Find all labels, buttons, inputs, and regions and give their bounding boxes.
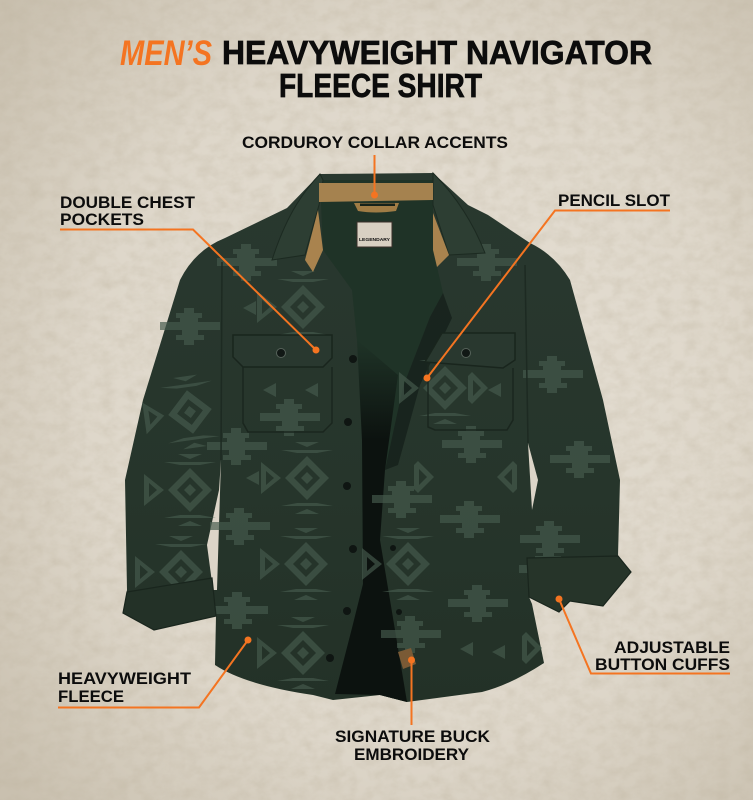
- front buttons: [326, 355, 402, 662]
- buck embroidery patch: [398, 648, 416, 669]
- callout: double chest pockets: DOUBLE CHEST: [60, 193, 196, 212]
- lapel shadow: [385, 293, 452, 470]
- title line one: HEAVYWEIGHT NAVIGATOR: [222, 34, 652, 71]
- callout: adjustable button cuffs: ADJUSTABLE: [614, 638, 730, 657]
- title: [120, 34, 652, 104]
- collar right: [433, 173, 485, 255]
- sleeve gap right: [528, 443, 538, 510]
- corduroy collar band: [319, 183, 433, 202]
- neck label: LEGENDARY: [359, 237, 390, 242]
- interior shadow: [335, 340, 407, 702]
- callout: heavyweight fleece: FLEECE: [58, 687, 124, 706]
- neck label: [357, 222, 392, 247]
- title accent: MEN'S: MEN’S: [120, 34, 212, 73]
- callout: adjustable button cuffs: [556, 596, 730, 674]
- hanger slot: [360, 204, 395, 206]
- callout: pencil slot: PENCIL SLOT: [558, 191, 671, 210]
- callout: double chest pockets: [60, 193, 320, 354]
- jacket interior fleece: [320, 180, 443, 702]
- callout: heavyweight fleece: [58, 636, 252, 708]
- jacket silhouette: [123, 173, 631, 702]
- callout: corduroy collar accents: [242, 133, 508, 198]
- left chest pocket: [233, 335, 332, 432]
- callout: adjustable button cuffs: BUTTON CUFFS: [595, 655, 730, 674]
- title line two: FLEECE SHIRT: [279, 67, 482, 104]
- corduroy tip right: [433, 213, 449, 267]
- callout: pencil slot: [424, 191, 671, 382]
- hanger loop: [354, 203, 399, 212]
- callout: signature buck embroidery: [335, 656, 491, 764]
- callout: double chest pockets: POCKETS: [60, 210, 144, 229]
- aztec pattern: [135, 244, 610, 689]
- corduroy tip left: [305, 210, 323, 272]
- sleeve gap left: [207, 460, 221, 590]
- sleeve seams: [221, 262, 528, 460]
- collar left: [272, 174, 323, 260]
- right cuff: [527, 556, 631, 612]
- jacket illustration: [123, 173, 631, 702]
- right chest pocket: [425, 333, 515, 430]
- callout: corduroy collar accents: CORDUROY COLLAR ACCENTS: [242, 133, 508, 152]
- left cuff: [123, 578, 216, 630]
- callout: heavyweight fleece: HEAVYWEIGHT: [58, 669, 192, 688]
- callout: signature buck embroidery: SIGNATURE BUCK: [335, 727, 491, 746]
- callout: signature buck embroidery: EMBROIDERY: [354, 745, 470, 764]
